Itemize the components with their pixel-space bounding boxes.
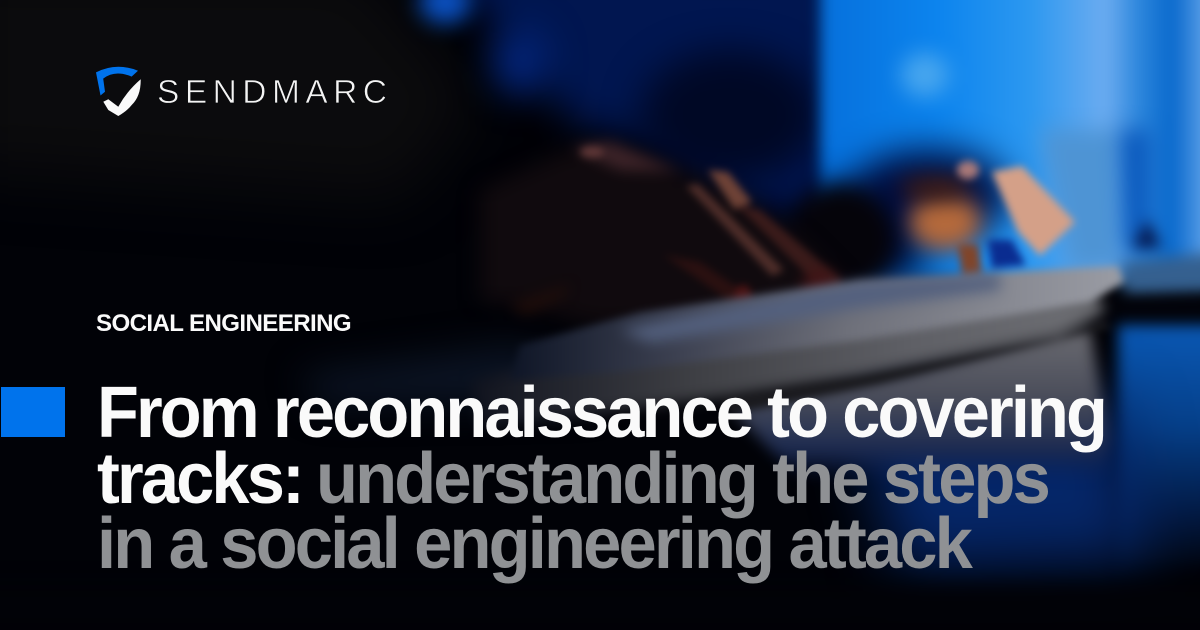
desk reflection, blue panel bbox=[1118, 325, 1200, 575]
category label: SOCIAL ENGINEERING bbox=[96, 310, 351, 337]
right hand bbox=[909, 194, 981, 250]
shelf right of keyboard bbox=[1120, 252, 1200, 296]
dark blue backdrop bbox=[440, 0, 840, 230]
bright blue screen bbox=[820, 0, 1200, 280]
blue accent square bbox=[1, 387, 65, 437]
title: in a social engineering attack bbox=[97, 504, 974, 584]
logo: Sendmarc bbox=[96, 67, 387, 116]
title: tracks: bbox=[97, 439, 302, 519]
wordmark: SENDMARC bbox=[157, 74, 387, 111]
bottom shade bbox=[0, 585, 1200, 630]
keyboard bbox=[470, 296, 1104, 428]
title: understanding the steps bbox=[316, 439, 1049, 519]
icon: shield blue arc bbox=[96, 67, 138, 96]
dark gap between hands bbox=[785, 185, 895, 295]
left hand bbox=[480, 145, 850, 325]
icon: shield white check bbox=[103, 79, 141, 116]
faint dark shoulder bbox=[0, 0, 480, 200]
dark wedge below keyboard bbox=[720, 322, 1112, 414]
title: From reconnaissance to covering bbox=[97, 373, 1105, 453]
table far left wisp bbox=[300, 345, 600, 405]
title bbox=[97, 373, 1105, 584]
